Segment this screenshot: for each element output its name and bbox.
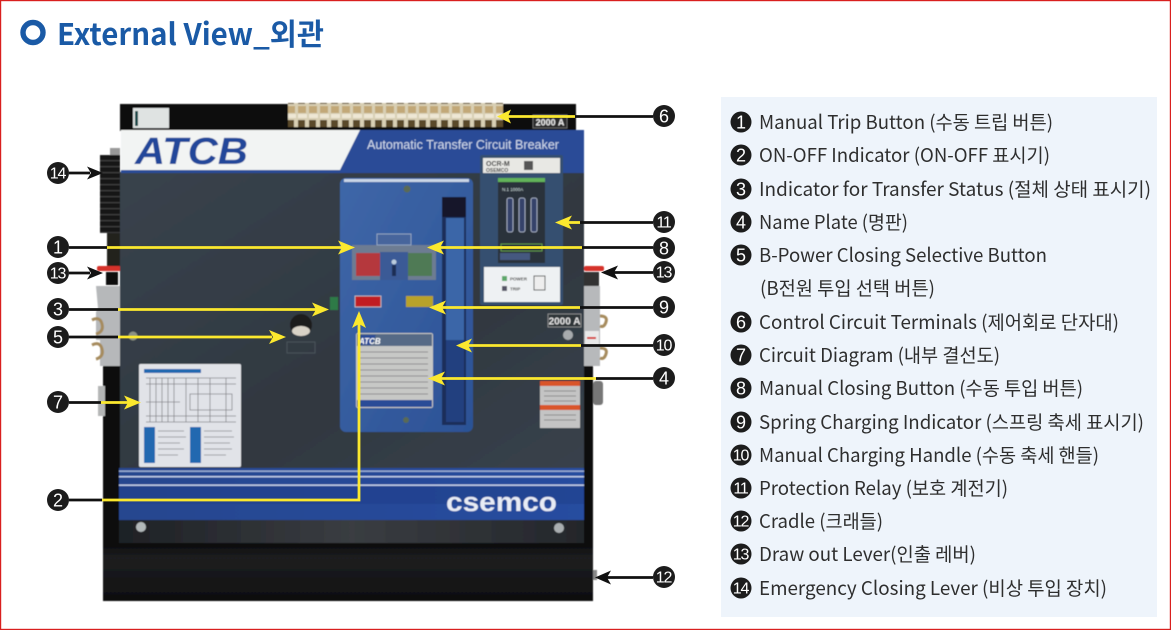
legend item 10: 10 [733,448,749,464]
manual closing button [408,253,432,276]
legend item 13: Draw out Lever(인출 레버) [759,540,976,567]
left side hardware [92,148,121,601]
callout 6: control circuit terminals [497,105,675,127]
callout 13 left: draw out lever [47,262,103,284]
callout 5: b-power closing button: 5 [53,328,63,348]
callout 9: spring charging indicator [429,296,675,318]
protection relay [480,155,563,305]
legend item 9: Spring Charging Indicator (스프링 축세 표시기) [759,408,1144,435]
callout 5: b-power closing button [47,326,286,348]
legend item 3: Indicator for Transfer Status (절체 상태 표시기) [759,175,1151,202]
callout 7: circuit diagram [47,391,141,413]
legend panel [721,97,1157,617]
callout 9: spring charging indicator: 9 [659,298,669,318]
callout 12: cradle: 12 [656,570,672,586]
legend item 11: Protection Relay (보호 계전기) [759,474,1008,501]
legend item 9: 9 [736,412,746,432]
legend item 7: 7 [736,346,746,366]
callout 11: protection relay [555,211,675,233]
legend item 6: Control Circuit Terminals (제어회로 단자대) [759,308,1119,335]
name plate [356,333,433,408]
warning labels [540,381,580,428]
title: External View_외관 [57,10,324,54]
transfer status indicator [330,297,338,310]
legend item 14: Emergency Closing Lever (비상 투입 장치) [759,574,1107,601]
rating label side: 2000 A [549,316,580,328]
spring charging indicator [406,296,433,307]
blue lower band [119,468,584,520]
callout 2: on-off indicator: 2 [53,490,63,510]
header band: Automatic Transfer Circuit Breaker [367,138,559,152]
legend item 4: 4 [736,212,746,232]
dark band with screws [119,520,584,543]
legend item 3: 3 [736,180,746,200]
callout 13 right: draw out lever [601,261,675,283]
legend item 11: 11 [733,480,749,498]
callout 7: circuit diagram: 7 [53,392,63,412]
breaker photo [92,103,606,601]
legend item 12: Cradle (크래들) [759,507,883,534]
legend item 2: ON-OFF Indicator (ON-OFF 표시기) [759,141,1050,168]
rating label top: 2000 A [536,118,565,128]
callout 4: name plate [428,367,675,389]
callout 13 right: draw out lever: 13 [656,264,672,282]
callout 1: manual trip button [47,236,355,258]
callout 10: manual charging handle: 10 [656,338,672,354]
black cradle base [103,543,593,601]
callout 8: manual closing button: 8 [659,238,669,258]
manual trip button [356,253,380,276]
logo: csemco [446,487,557,517]
legend item 5 [730,241,1047,301]
legend item 2: 2 [736,146,746,166]
callout 6: control circuit terminals: 6 [659,106,669,126]
top black section [120,104,576,131]
callout 3: transfer status indicator [47,298,329,320]
name plate: ATCB [358,337,381,346]
button housing [352,234,436,280]
callout 13 left: draw out lever: 13 [50,266,66,282]
protection relay: OCR-M [486,161,510,168]
centre blue panel [340,178,473,432]
legend item 8: Manual Closing Button (수동 투입 버튼) [759,374,1083,401]
legend item 14: 14 [733,580,749,598]
legend item 5: (B전원 투입 선택 버튼) [760,274,935,301]
protection relay: POWER [510,276,528,282]
legend item 5: 5 [736,246,746,266]
protection relay: N.1 1000A [502,187,523,192]
header band [121,130,584,173]
protection relay: TRIP [510,286,520,292]
legend item 10: Manual Charging Handle (수동 축세 핸들) [759,441,1099,468]
callout 14: emergency closing lever [47,162,103,184]
callout 1: manual trip button: 1 [53,238,63,258]
icon: title ring [23,22,43,42]
legend item 1: Manual Trip Button (수동 트립 버튼) [759,108,1053,135]
callout 10: manual charging handle [456,334,675,356]
callout 4: name plate: 4 [659,368,669,388]
on-off indicator [355,296,381,307]
legend item 7: Circuit Diagram (내부 결선도) [759,341,1000,368]
legend item 12: 12 [733,514,749,530]
header band: ATCB [134,131,248,173]
b-power closing button [287,314,315,353]
legend item 13: 13 [733,546,749,564]
manual charging handle [442,197,466,425]
legend item 8: 8 [736,378,746,398]
front panel [120,172,584,469]
callout 8: manual closing button [427,237,675,259]
legend item 6: 6 [736,312,746,332]
control terminals [288,103,503,127]
callout 3: transfer status indicator: 3 [53,300,63,320]
callout 2: on-off indicator [47,311,366,511]
callout 11: protection relay: 11 [656,214,672,232]
circuit diagram label [139,364,241,467]
legend item 5: B-Power Closing Selective Button [759,241,1047,268]
protection relay: OSEMCO [486,168,508,174]
legend item 1: 1 [736,112,746,132]
right side hardware [578,266,606,601]
rating label top [533,115,567,128]
callout 12: cradle [595,566,675,588]
legend item 4: Name Plate (명판) [759,208,908,235]
callout 14: emergency closing lever: 14 [50,166,66,182]
